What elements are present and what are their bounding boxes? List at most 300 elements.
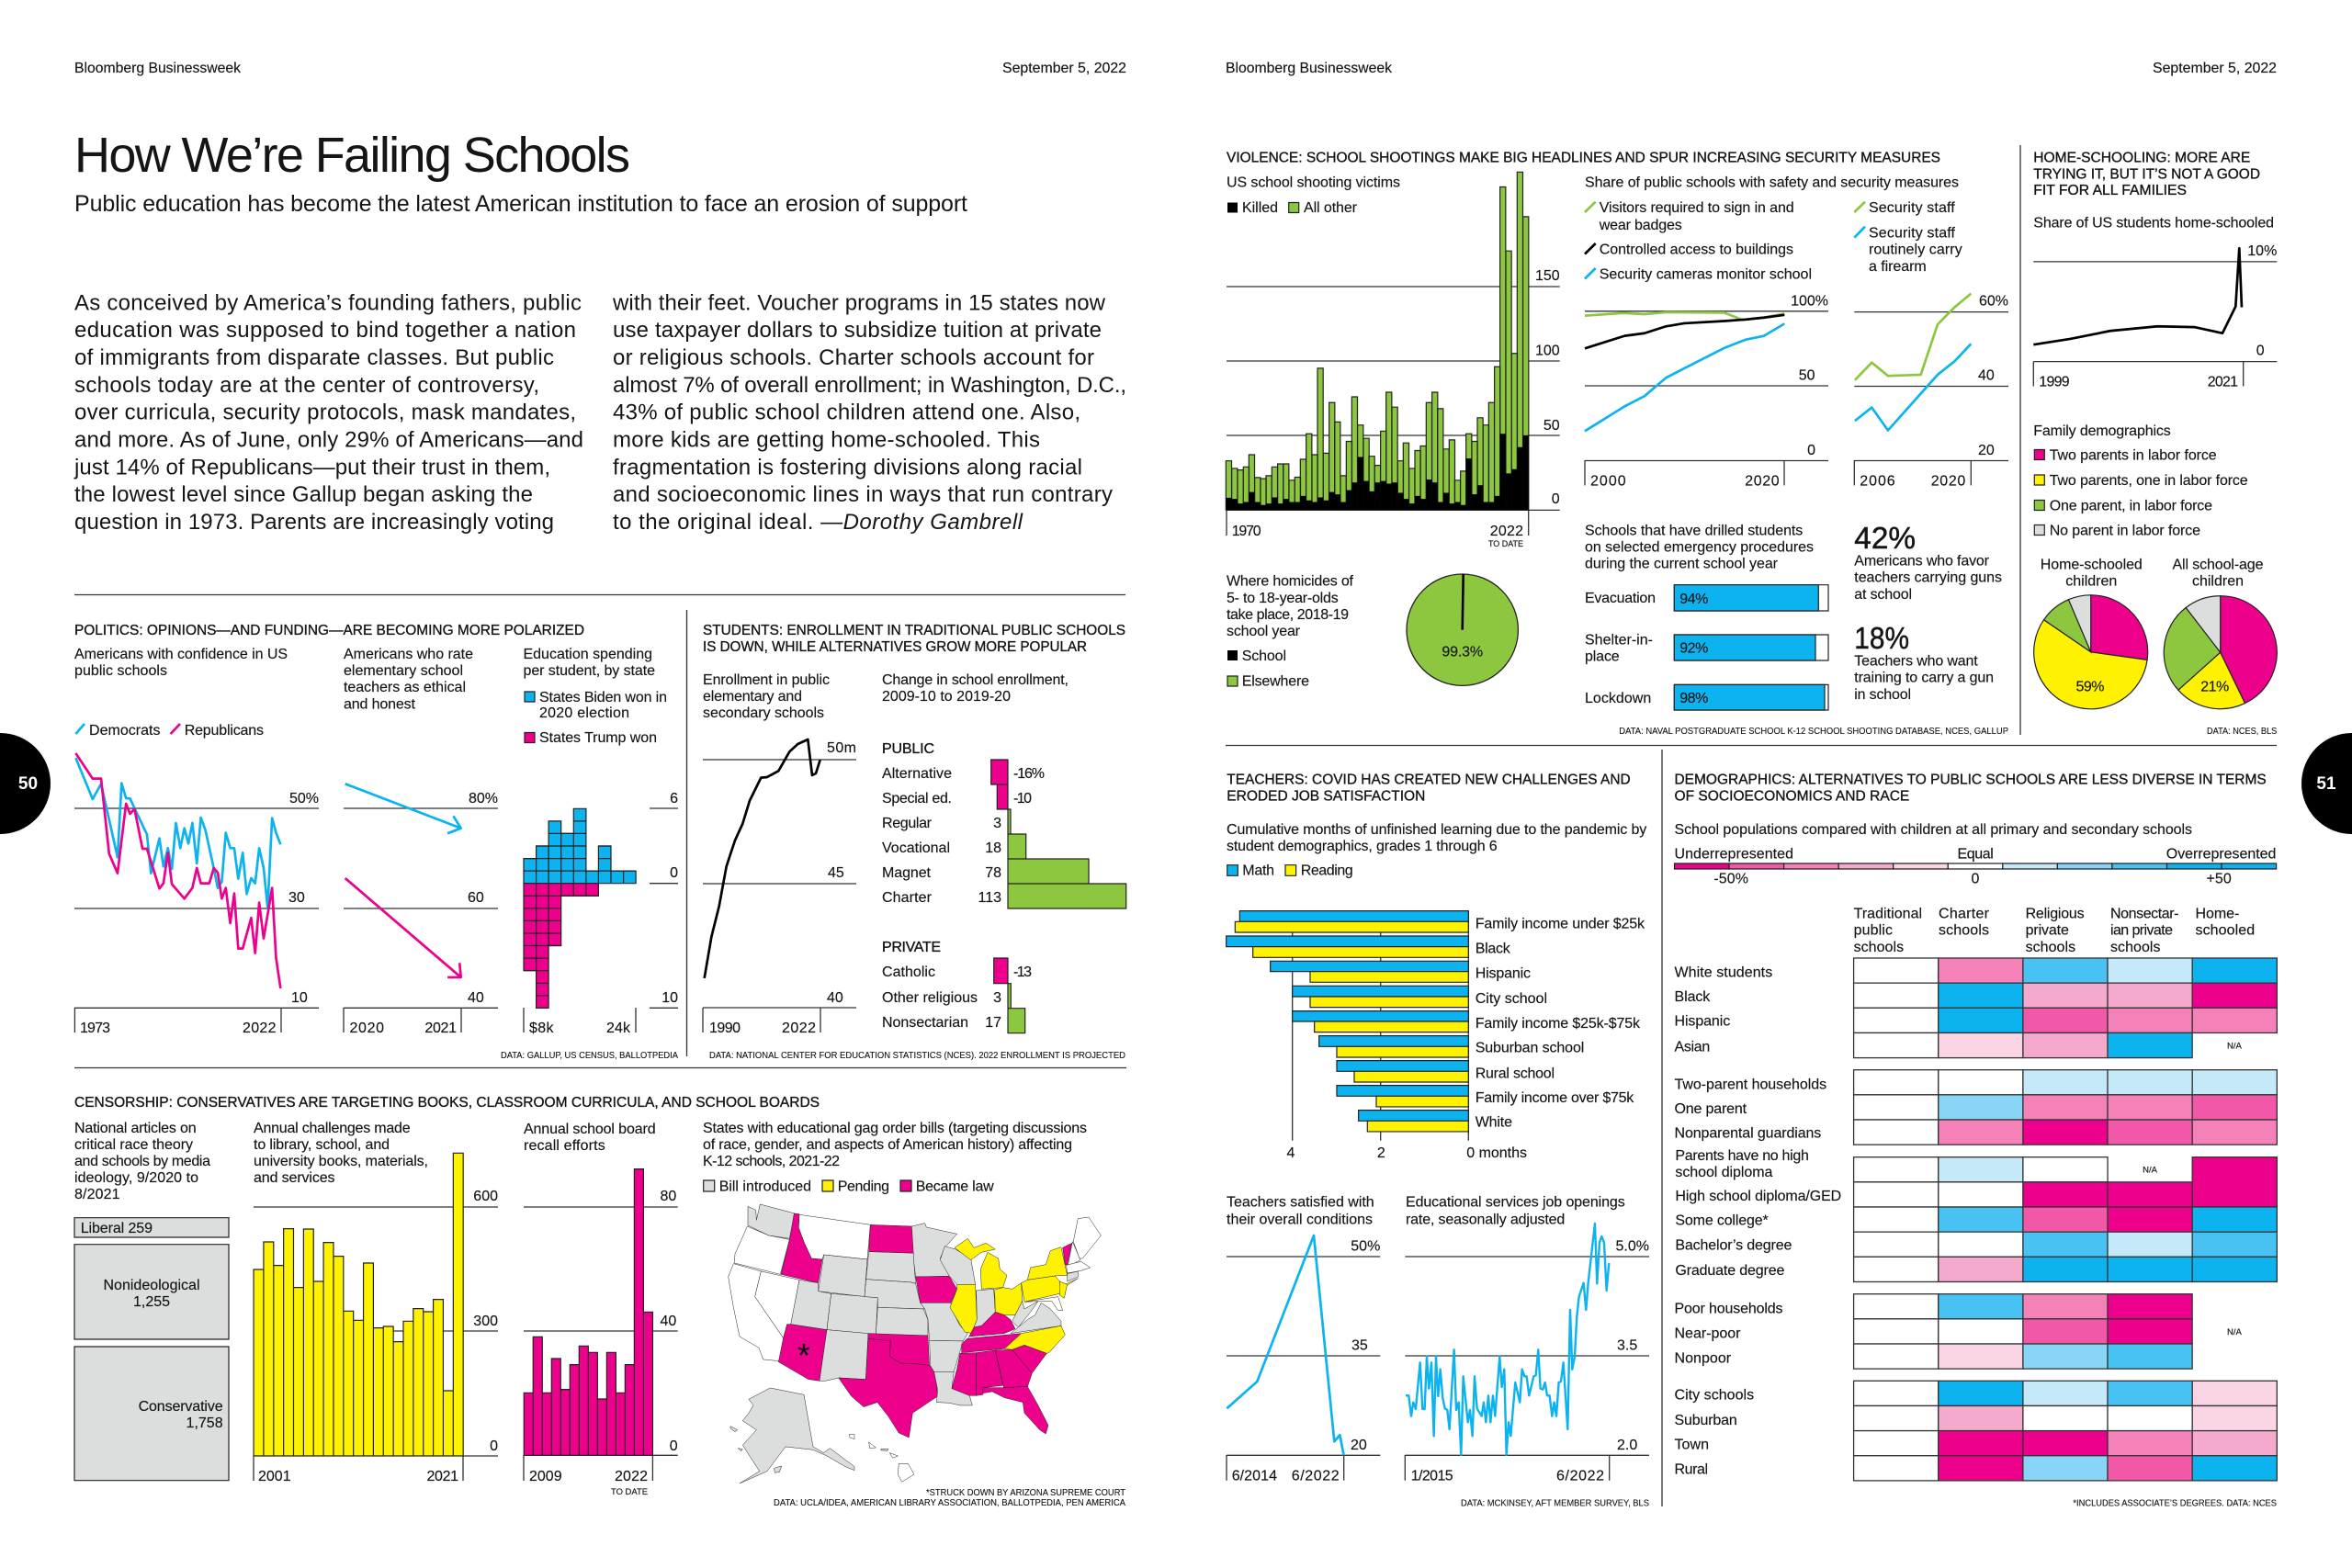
text block: intro column 1: just 14% of Republicans—put their trust in them,	[74, 455, 550, 479]
line chart: enrollment: 50m	[827, 740, 856, 756]
pie chart: home-schooled children: Home-schooled	[2041, 558, 2143, 573]
row labels	[1674, 964, 1841, 1478]
text block: intro column 2: almost 7% of overall enrollment; in Washington, D.C.,	[613, 373, 1126, 398]
callout: 42 percent: 42%	[1854, 521, 1916, 555]
line chart: job openings rate: 6/2022	[1556, 1469, 1604, 1484]
line chart: security measures: 50	[1799, 367, 1815, 384]
text: ethical and honest title: teachers as ethical	[344, 680, 466, 695]
text: homicides title and legend: school year	[1227, 624, 1301, 639]
bar chart: change in public school enrollment	[882, 741, 1126, 908]
legend: security staff: routinely carry	[1869, 243, 1962, 257]
bar chart: annual challenges: 600	[473, 1189, 498, 1204]
arrow chart: teacher ethics ratings: 2020	[349, 1021, 384, 1036]
row labels: Graduate degree	[1675, 1263, 1784, 1279]
bar chart: emergency drills: 94%	[1679, 592, 1708, 607]
line chart: security staff: 2006	[1860, 473, 1895, 489]
row labels: Black	[1674, 989, 1711, 1005]
pie chart: home-schooled children: 59%	[2076, 680, 2104, 694]
heading: students	[703, 623, 1125, 655]
row labels: Nonpoor	[1674, 1350, 1732, 1366]
header: right page: September 5, 2022	[2153, 61, 2277, 76]
legend: map: Pending	[838, 1179, 889, 1195]
row labels: One parent	[1674, 1101, 1747, 1117]
bar chart: annual challenges: 0	[490, 1438, 498, 1454]
text: gag order map title	[703, 1121, 1087, 1169]
row labels: Hispanic	[1674, 1014, 1730, 1030]
legend: democrats and republicans	[75, 723, 264, 739]
panel: violence	[1226, 151, 2008, 737]
bar chart: annual challenges	[254, 1153, 498, 1484]
heatmap: parent education: N/A	[2143, 1166, 2158, 1176]
source: politics: DATA: GALLUP, US CENSUS, BALLOTPEDIA	[501, 1051, 678, 1061]
text: homicides title and legend: 5- to 18-year-olds	[1227, 591, 1339, 606]
column headers: private	[2026, 922, 2069, 938]
legend: math and reading	[1227, 863, 1353, 879]
legend: security measures: wear badges	[1599, 218, 1682, 233]
line chart: confidence in public schools: 2022	[243, 1021, 277, 1036]
source: censorship: DATA: UCLA/IDEA, AMERICAN LIBRARY ASSOCIATION, BALLOTPEDIA, PEN AMERICA	[774, 1498, 1125, 1508]
legend: family demographics: Two parents in labor force	[2050, 448, 2217, 463]
text: school populations title: School populations compared with children at all primary and secondary schools	[1674, 822, 2192, 838]
pie chart: where homicides take place: 99.3%	[1442, 644, 1483, 660]
heatmap: race and ethnicity: N/A	[2227, 1042, 2242, 1052]
header: left page: Bloomberg Businessweek	[74, 61, 242, 76]
text: national articles title: 8/2021	[74, 1187, 120, 1202]
heading: demographics	[1674, 772, 2267, 804]
text: national articles title: critical race theory	[74, 1137, 193, 1153]
header: left page	[74, 61, 1126, 76]
bar chart: change in public school enrollment: 18	[985, 840, 1001, 856]
line chart: confidence in public schools: 50%	[289, 791, 319, 807]
text: education spending title	[524, 647, 655, 679]
legend: security staff: Security staff	[1869, 226, 1956, 242]
legend: representation color scale: Underrepresented	[1674, 847, 1793, 863]
text: unfinished learning title	[1227, 822, 1646, 854]
text: job openings title	[1406, 1194, 1625, 1227]
text: national articles title: and schools by media	[74, 1154, 210, 1169]
bar chart: recall efforts	[524, 1169, 678, 1497]
row labels: Bachelor’s degree	[1675, 1238, 1792, 1254]
legend: map: Bill introduced	[719, 1179, 811, 1195]
bar chart: annual challenges: 2001	[258, 1469, 291, 1484]
legend: security measures: Visitors required to sign in and	[1600, 200, 1794, 216]
pie chart: all school-age children	[2164, 558, 2277, 709]
page number: 50: 50	[18, 774, 38, 794]
legend: family demographics: Two parents, one in labor force	[2050, 473, 2248, 489]
callout: 42 percent: at school	[1854, 587, 1912, 603]
bar chart: change in public school enrollment: Charter	[882, 890, 933, 906]
subtitle: Public education has become the latest American institution to face an erosion of support	[74, 191, 967, 217]
bar chart: emergency drills	[1585, 585, 1828, 710]
text: unfinished learning title: student demographics, grades 1 through 6	[1227, 839, 1498, 854]
row labels: Near-poor	[1674, 1326, 1741, 1342]
text: drills title: during the current school year	[1585, 556, 1779, 571]
bar chart: change in public school enrollment: Special ed.	[882, 791, 952, 807]
callout: 18 percent: training to carry a gun	[1854, 671, 1994, 685]
line chart: teachers satisfied: 6/2022	[1292, 1469, 1340, 1484]
heading: demographics: OF SOCIOECONOMICS AND RACE	[1674, 788, 1909, 804]
row labels: White students	[1674, 964, 1772, 980]
text block: intro column 1: As conceived by America’s founding fathers, public	[74, 290, 582, 315]
line chart: teachers satisfied: 35	[1351, 1337, 1368, 1353]
text: homicides title and legend: Elsewhere	[1242, 674, 1309, 690]
bar chart: school shooting victims: 150	[1535, 268, 1560, 284]
text: annual challenges title: and services	[254, 1170, 334, 1186]
line chart: share home-schooled: 0	[2256, 344, 2265, 358]
legend: representation color scale: 0	[1972, 871, 1980, 886]
line chart: confidence in public schools: 10	[291, 990, 308, 1006]
line chart: teachers satisfied: 20	[1351, 1438, 1367, 1453]
bar chart: recall efforts: TO DATE	[611, 1487, 648, 1497]
callout: 18 percent: in school	[1854, 687, 1911, 703]
row labels: City schools	[1674, 1387, 1754, 1403]
line chart: confidence in public schools: 30	[288, 890, 305, 906]
bar chart: change in private school enrollment: -13	[1013, 964, 1032, 980]
text: national articles title: National articles on	[74, 1121, 197, 1136]
text block: intro column 2: fragmentation is fostering divisions along racial	[613, 455, 1082, 479]
histogram: spending per student: $8k	[529, 1021, 555, 1036]
arrow chart: teacher ethics ratings: 80%	[469, 791, 498, 807]
heading: students: IS DOWN, WHILE ALTERNATIVES GROW MORE POPULAR	[703, 639, 1087, 655]
bar chart: recall efforts: 40	[660, 1314, 676, 1329]
legend: security staff: a firearm	[1869, 259, 1927, 275]
text: confidence chart title: Americans with confidence in US	[74, 647, 288, 662]
row labels: Asian	[1674, 1039, 1710, 1055]
column headers: schooled	[2196, 922, 2255, 938]
bar chart: school shooting victims	[1226, 172, 1560, 549]
pie chart: all school-age children: 21%	[2200, 680, 2229, 694]
callout: 18 percent: Teachers who want	[1854, 654, 1978, 670]
text: ethical and honest title: elementary school	[344, 663, 463, 679]
heatmap: locale	[1854, 1381, 2277, 1481]
bar chart: months of unfinished learning: 4	[1287, 1145, 1295, 1161]
bar chart: change in public school enrollment: -10	[1013, 791, 1032, 807]
legend: security measures: Security cameras monitor school	[1600, 266, 1812, 283]
legend: democrats and republicans: Republicans	[185, 723, 264, 739]
text block: intro column 1: question in 1973. Parents are increasingly voting	[74, 510, 554, 535]
text: drills title: on selected emergency procedures	[1585, 539, 1814, 555]
heading: violence: VIOLENCE: SCHOOL SHOOTINGS MAKE BIG HEADLINES AND SPUR INCREASING SECURITY MEASURES	[1227, 151, 1940, 165]
callout: 42 percent: Americans who favor	[1854, 554, 1990, 570]
text: homicides title and legend: take place, 2018-19	[1227, 607, 1349, 623]
bar chart: emergency drills: Evacuation	[1585, 591, 1656, 606]
header: right page	[1226, 61, 2277, 76]
text: enrollment chart title	[703, 672, 830, 721]
text: enrollment chart title: elementary and	[703, 689, 802, 705]
legend: representation color scale: Overrepresented	[2166, 847, 2276, 863]
column headers: Charter	[1939, 906, 1990, 921]
text block: intro column 2: and socioeconomic lines in ways that run contrary	[613, 482, 1113, 507]
bar chart: change in public school enrollment: 78	[985, 865, 1001, 881]
line chart: security measures: 2000	[1590, 473, 1626, 489]
column headers: schools	[2110, 940, 2161, 955]
source: home-schooling: DATA: NCES, BLS	[2207, 727, 2278, 737]
treemap: articles by media ideology	[74, 1218, 229, 1481]
bar chart: change in public school enrollment: Regular	[882, 816, 933, 831]
text: recall efforts title: Annual school board	[524, 1122, 656, 1137]
bar chart: months of unfinished learning: Family income $25k-$75k	[1476, 1016, 1641, 1032]
text: national articles title	[74, 1121, 210, 1202]
legend: security staff	[1854, 200, 1962, 275]
column headers: Home-	[2196, 906, 2239, 921]
heading: home-schooling: HOME-SCHOOLING: MORE ARE	[2033, 151, 2250, 165]
line chart: security staff	[1854, 294, 2008, 489]
bar chart: emergency drills: Lockdown	[1585, 691, 1651, 706]
bar chart: school shooting victims: 50	[1544, 418, 1560, 434]
text block: intro column 2: or religious schools. Charter schools account for	[613, 345, 1094, 370]
bar chart: change in private school enrollment	[882, 940, 1032, 1033]
text: shooting victims title: US school shooting victims	[1227, 175, 1400, 191]
line chart: enrollment: 45	[828, 865, 844, 881]
panel: demographics	[1674, 772, 2277, 1508]
legend: killed and other: Killed	[1242, 200, 1278, 216]
row labels: Two-parent households	[1674, 1077, 1826, 1092]
bar chart: change in public school enrollment: -16%	[1013, 766, 1045, 782]
text: teachers satisfied title: their overall conditions	[1227, 1212, 1373, 1227]
bar chart: months of unfinished learning: Black	[1476, 941, 1511, 956]
row labels: High school diploma/GED	[1675, 1189, 1841, 1204]
bar chart: school shooting victims: TO DATE	[1488, 539, 1523, 549]
text: unfinished learning title: Cumulative months of unfinished learning due to the pandemic by	[1227, 822, 1646, 838]
line chart: security staff: 40	[1978, 367, 1995, 384]
source: censorship	[774, 1488, 1125, 1508]
line chart: confidence in public schools	[74, 753, 319, 1036]
heading: home-schooling: TRYING IT, BUT IT’S NOT A GOOD	[2033, 166, 2260, 182]
line chart: teachers satisfied: 6/2014	[1232, 1469, 1277, 1484]
text: change in enrollment title: 2009-10 to 2019-20	[882, 689, 1011, 705]
histogram: spending per student: 0	[670, 865, 678, 881]
column headers	[1854, 906, 2255, 955]
legend: map: Became law	[916, 1179, 994, 1195]
bar chart: recall efforts: 2009	[529, 1469, 562, 1484]
legend: family demographics	[2033, 423, 2248, 538]
column headers: Nonsectar-	[2110, 906, 2179, 921]
treemap: articles by media ideology: 1,758	[187, 1416, 223, 1431]
text: drills title: Schools that have drilled students	[1585, 524, 1803, 539]
text: national articles title: ideology, 9/2020 to	[74, 1170, 198, 1186]
row labels: Nonparental guardians	[1674, 1126, 1821, 1142]
text: change in enrollment title	[882, 672, 1069, 705]
text block: intro column 2: with their feet. Voucher programs in 15 states now	[612, 290, 1106, 315]
text: homicides title and legend: Where homicides of	[1227, 573, 1354, 590]
line chart: teachers satisfied	[1227, 1235, 1380, 1484]
bar chart: change in public school enrollment: Magnet	[882, 865, 932, 881]
heading: demographics: DEMOGRAPHICS: ALTERNATIVES TO PUBLIC SCHOOLS ARE LESS DIVERSE IN TERMS	[1674, 772, 2267, 787]
callout: 18 percent	[1854, 621, 1994, 703]
pie chart: home-schooled children	[2034, 558, 2148, 709]
bar chart: school shooting victims: 100	[1535, 344, 1560, 358]
title: How We’re Failing Schools	[74, 128, 630, 183]
heading: home-schooling: FIT FOR ALL FAMILIES	[2033, 183, 2187, 198]
page number: 51	[2301, 733, 2352, 834]
line chart: security staff: 2020	[1931, 473, 1965, 489]
bar chart: change in public school enrollment: Alternative	[882, 766, 952, 782]
heatmap: parent education	[1854, 1157, 2277, 1281]
line chart: confidence in public schools: 1973	[80, 1021, 110, 1036]
text block: intro column 1: and more. As of June, only 29% of Americans—and	[74, 428, 583, 452]
text: ethical and honest title: Americans who rate	[344, 647, 473, 662]
column headers: schools	[2026, 940, 2075, 955]
text: enrollment chart title: secondary schools	[703, 705, 824, 721]
line chart: share home-schooled: 2021	[2208, 375, 2238, 389]
column headers: Religious	[2026, 906, 2085, 921]
row labels: Parents have no high	[1675, 1148, 1809, 1164]
legend: biden and trump states: States Trump won	[539, 730, 657, 746]
text: education spending title: per student, by state	[524, 663, 655, 679]
line chart: job openings rate: 2.0	[1617, 1438, 1637, 1453]
bar chart: months of unfinished learning	[1227, 911, 1645, 1161]
source: teachers: DATA: MCKINSEY, AFT MEMBER SURVEY, BLS	[1461, 1498, 1649, 1508]
text: education spending title: Education spending	[524, 647, 652, 662]
text: gag order map title: States with educational gag order bills (targeting discussions	[703, 1121, 1087, 1136]
heatmap: household type	[1854, 1070, 2277, 1145]
legend: representation color scale: -50%	[1713, 871, 1748, 886]
legend: biden and trump states: 2020 election	[539, 705, 629, 721]
column headers: schools	[1854, 940, 1904, 955]
bar chart: school shooting victims: 1970	[1232, 524, 1261, 539]
text block: intro column 2: use taxpayer dollars to subsidize tuition at private	[613, 318, 1102, 343]
heading: politics: POLITICS: OPINIONS—AND FUNDING—ARE BECOMING MORE POLARIZED	[74, 623, 584, 638]
bar chart: annual challenges: 300	[473, 1314, 498, 1329]
text block: intro column 2: more kids are getting home-schooled. This	[613, 428, 1040, 452]
bar chart: change in private school enrollment: Other religious	[882, 990, 978, 1006]
text: recall efforts title: recall efforts	[524, 1138, 605, 1154]
bar chart: emergency drills: place	[1585, 649, 1620, 665]
page number: 51: 51	[2316, 774, 2336, 794]
heatmap: household income: N/A	[2227, 1327, 2242, 1337]
bar chart: months of unfinished learning: Family income over $75k	[1476, 1090, 1634, 1106]
bar chart: change in public school enrollment: PUBLIC	[882, 741, 934, 757]
pie chart: all school-age children: children	[2192, 573, 2244, 590]
line chart: share home-schooled: 1999	[2039, 375, 2070, 389]
arrow chart: teacher ethics ratings: 60	[468, 890, 484, 906]
text block: intro column 2	[612, 290, 1126, 535]
panel: censorship	[74, 1095, 1125, 1508]
line chart: security measures: 0	[1807, 443, 1815, 458]
header: right page: Bloomberg Businessweek	[1226, 61, 1393, 76]
pie chart: home-schooled children: children	[2065, 573, 2117, 590]
line chart: security staff: 60%	[1979, 294, 2008, 310]
callout: 42 percent: teachers carrying guns	[1854, 570, 2002, 585]
text block: intro column 1: of immigrants from disparate classes. But public	[74, 345, 554, 370]
panel: students	[703, 623, 1126, 1061]
bar chart: months of unfinished learning: City school	[1476, 991, 1547, 1007]
column headers: public	[1854, 922, 1893, 938]
text: drills title	[1585, 524, 1814, 571]
legend: biden and trump states	[525, 690, 667, 746]
bar chart: change in public school enrollment: 113	[978, 890, 1001, 906]
text block: intro column 2: to the original ideal. —Dorothy Gambrell	[613, 510, 1023, 535]
heading: students: STUDENTS: ENROLLMENT IN TRADITIONAL PUBLIC SCHOOLS	[703, 623, 1125, 638]
legend: killed and other: All other	[1304, 200, 1358, 216]
bar chart: change in public school enrollment: 3	[993, 816, 1001, 831]
line chart: enrollment	[703, 739, 856, 1036]
bar chart: months of unfinished learning: Family income under $25k	[1476, 917, 1645, 932]
column headers: schools	[1939, 922, 1989, 938]
line chart: job openings rate: 1/2015	[1411, 1469, 1453, 1484]
line chart: security measures: 2020	[1745, 473, 1780, 489]
histogram: spending per student	[524, 791, 678, 1036]
histogram: spending per student: 24k	[606, 1021, 631, 1036]
icon: asterisk on Arizona: *	[797, 1337, 810, 1374]
text: security measures title: Share of public schools with safety and security measures	[1585, 175, 1959, 191]
panel: politics	[74, 623, 678, 1061]
bar chart: months of unfinished learning: Hispanic	[1476, 965, 1531, 981]
arrow chart: teacher ethics ratings	[344, 784, 498, 1036]
callout: 42 percent	[1854, 521, 2002, 603]
legend: biden and trump states: States Biden won in	[539, 690, 667, 705]
text: annual challenges title: Annual challenges made	[254, 1121, 411, 1136]
bar chart: recall efforts: 0	[670, 1438, 678, 1454]
line chart: enrollment: 1990	[709, 1021, 741, 1036]
treemap: articles by media ideology: Conservative	[139, 1399, 223, 1415]
bar chart: recall efforts: 2022	[615, 1469, 648, 1484]
legend: security measures: Controlled access to buildings	[1600, 243, 1793, 257]
bar chart: change in private school enrollment: PRIVATE	[882, 940, 941, 955]
text: recall efforts title	[524, 1122, 656, 1154]
heatmap: race and ethnicity	[1854, 958, 2277, 1058]
line chart: enrollment: 40	[827, 990, 843, 1006]
text: homicides title and legend	[1227, 573, 1354, 690]
heading: home-schooling	[2033, 151, 2260, 198]
treemap: articles by media ideology: Liberal 259	[81, 1221, 153, 1236]
text: teachers satisfied title: Teachers satisfied with	[1227, 1194, 1374, 1210]
text: ethical and honest title	[344, 647, 473, 713]
treemap: articles by media ideology: Nonideological	[103, 1278, 200, 1293]
bar chart: school shooting victims: 2022	[1490, 524, 1523, 539]
text: share home-schooled title: Share of US students home-schooled	[2033, 215, 2274, 231]
row labels: Poor households	[1674, 1302, 1782, 1317]
text: change in enrollment title: Change in school enrollment,	[882, 672, 1069, 688]
bar chart: emergency drills: 92%	[1679, 640, 1708, 656]
text block: intro column 1: schools today are at the center of controversy,	[74, 373, 539, 398]
row labels: Rural	[1674, 1462, 1708, 1478]
bar chart: months of unfinished learning: White	[1476, 1115, 1512, 1131]
bar chart: months of unfinished learning: Suburban school	[1476, 1041, 1584, 1056]
text block: intro column 1: education was supposed to bind together a nation	[74, 318, 576, 343]
column headers: ian private	[2110, 922, 2173, 938]
bar chart: change in private school enrollment: 3	[993, 990, 1001, 1006]
heading: censorship: CENSORSHIP: CONSERVATIVES ARE TARGETING BOOKS, CLASSROOM CURRICULA, AND SCHOOL BOARDS	[74, 1095, 820, 1111]
row labels: Some college*	[1675, 1213, 1769, 1229]
row labels: school diploma	[1675, 1165, 1772, 1180]
legend: democrats and republicans: Democrats	[89, 723, 160, 739]
bar chart: recall efforts: 80	[660, 1189, 676, 1204]
text: ethical and honest title: and honest	[344, 696, 416, 713]
text: job openings title: rate, seasonally adjusted	[1406, 1212, 1565, 1227]
legend: family demographics: No parent in labor force	[2050, 523, 2200, 538]
legend: math and reading: Math	[1242, 863, 1274, 879]
histogram: spending per student: 6	[670, 791, 678, 807]
text: confidence chart title: public schools	[74, 663, 167, 679]
bar chart: emergency drills: Shelter-in-	[1585, 633, 1653, 649]
text: job openings title: Educational services job openings	[1406, 1194, 1625, 1210]
panel: home-schooling	[2033, 151, 2278, 737]
map: states with gag order bills	[729, 1204, 1101, 1483]
bar chart: emergency drills: 98%	[1679, 691, 1708, 706]
legend: security measures	[1585, 200, 1812, 283]
legend: security staff: Security staff	[1869, 200, 1955, 216]
heading: teachers	[1227, 772, 1631, 804]
bar chart: annual challenges: 2021	[426, 1469, 458, 1484]
line chart: job openings rate: 3.5	[1617, 1337, 1637, 1353]
text: gag order map title: K-12 schools, 2021-22	[703, 1154, 840, 1169]
line chart: enrollment: 2022	[782, 1021, 816, 1036]
text: teachers satisfied title	[1227, 1194, 1374, 1227]
source: violence: DATA: NAVAL POSTGRADUATE SCHOOL K-12 SCHOOL SHOOTING DATABASE, NCES, GALLUP	[1619, 727, 2008, 737]
pie chart: all school-age children: All school-age	[2172, 558, 2264, 573]
line chart: job openings rate	[1405, 1224, 1649, 1484]
